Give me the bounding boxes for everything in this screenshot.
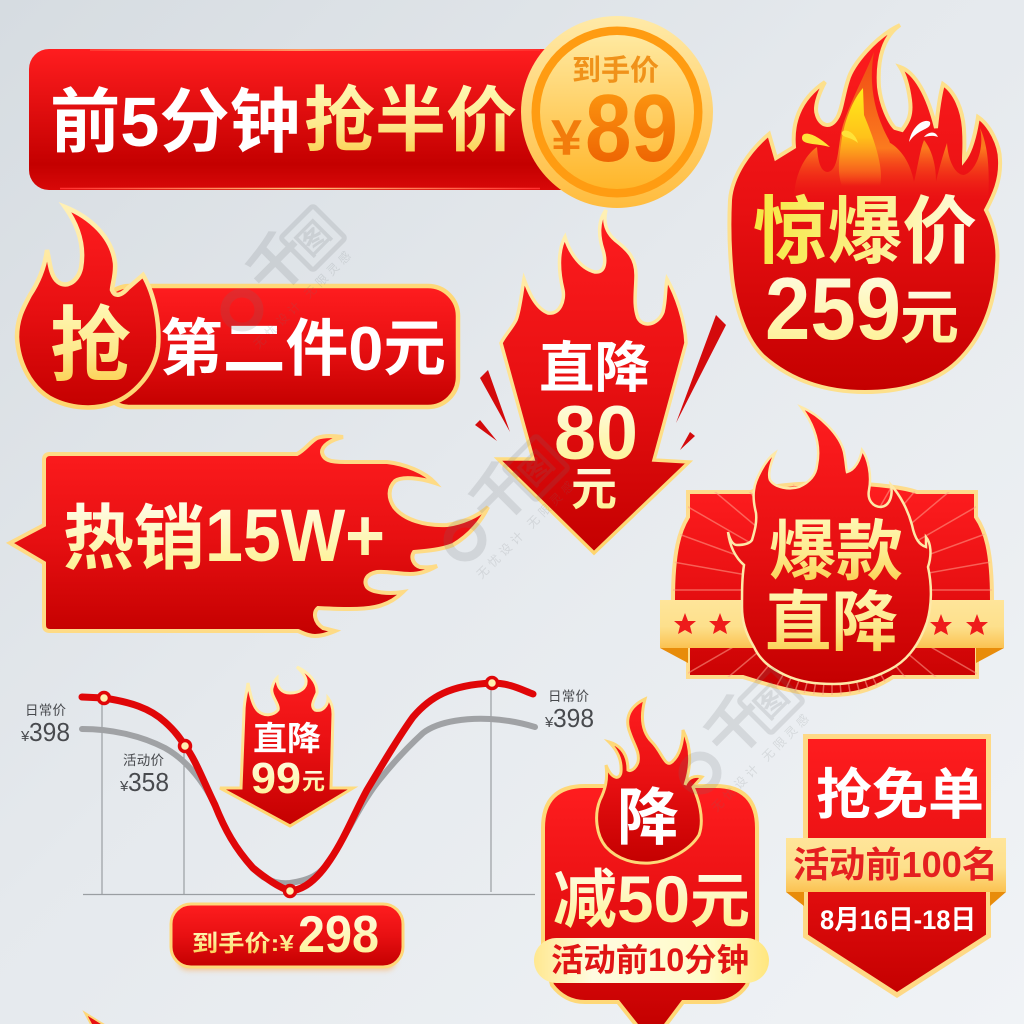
label: activity price [119,753,169,797]
small arrow shape [220,667,353,826]
card body [543,786,757,1024]
shield title: 抢免单 [816,764,984,826]
badge: bestseller price drop [660,404,1004,697]
badge: first 5 minutes half price [29,49,589,190]
card main text: 减 [553,864,617,936]
medallion line two: 直降 [765,585,898,659]
watermark one: 千 [233,219,323,309]
badge: free order shield [786,736,1006,995]
burst rays [475,315,726,450]
badge: shocking price flame [729,25,1000,392]
line chart: price curve [20,678,594,896]
arrow flame shape [498,210,689,553]
red price line [82,683,533,891]
decorative cut-off flame tip [85,1013,106,1024]
flame character: 抢 [50,301,131,392]
chart data points [98,678,498,896]
label: activity price: 活动价 [123,753,164,768]
inner yellow fire [839,88,881,186]
flame [17,207,158,407]
banner white text: 前5分钟 [50,83,300,161]
watermark one: 图 [290,215,338,263]
watermark two: 无忧设计 无限灵感 [473,475,580,582]
watermark one [225,205,357,352]
sunburst backing [673,483,992,695]
label: regular price right: 日常价 [548,689,590,704]
label: regular price left: 日常价 [25,703,66,718]
small arrow number: 99 [251,754,301,803]
watermark three [683,668,815,815]
watermark two [448,435,580,582]
gray regular price line [82,719,535,883]
banner body [29,49,589,190]
icon: gold price coin [521,16,713,208]
banner gold text: 抢半价 [304,82,517,161]
card pill text: 活动前10分钟 [551,942,749,978]
tag number: 15W+ [205,494,385,577]
label: regular price right: ¥ [544,714,554,731]
label: regular price left: ¥ [20,728,30,745]
pill label: 到手价:¥ [192,930,294,956]
white sparks [909,121,938,142]
label: regular price left: 398 [29,717,70,747]
medallion line one: 爆款 [769,514,903,588]
arrow unit: 元 [571,463,617,515]
stars [674,613,988,635]
badge: final price pill [171,904,403,970]
tag text: 热销 [63,500,205,579]
card flame character: 降 [617,784,679,853]
watermark one: 无忧设计 无限灵感 [250,245,357,352]
label: activity price: ¥ [119,778,129,795]
label: regular price left [20,703,70,747]
badge: hot sale flame tag [10,436,488,636]
watermark three: 千 [691,682,781,772]
small arrow unit: 元 [302,768,325,794]
card flame [597,699,702,863]
arrow number: 80 [554,391,638,476]
watermark three: 无忧设计 无限灵感 [708,708,815,815]
gold ribbon [660,600,1004,648]
watermark two: 图 [513,445,561,493]
coin price: 89 [585,75,678,182]
sparks [802,130,858,147]
tag shape [10,436,488,636]
flame unit: 元 [900,285,959,351]
shield ribbon [786,838,1006,892]
inner orange fire [794,52,989,200]
date text: 8月16日-18日 [820,905,976,935]
pill body [100,286,458,407]
small arrow title: 直降 [253,720,321,757]
card unit: 元 [690,868,750,935]
coin yen sign: ¥ [551,110,582,166]
coin label: 到手价 [572,54,659,87]
chart axes [83,686,535,894]
card number: 50 [617,862,690,936]
flame body [729,25,1000,392]
shield body [806,736,988,995]
label: activity price: 358 [128,767,169,797]
card pill [534,938,769,983]
flame title: 惊爆价 [753,190,977,273]
badge: small flame arrow drop 99 [220,667,353,826]
watermark three: 图 [748,678,796,726]
banner highlights [60,50,540,188]
pill shadow [178,950,396,970]
badge: second item 0 yuan [17,207,458,407]
pill text: 第二件0元 [160,315,446,384]
pill price: 298 [298,906,379,964]
badge: reduce 50 yuan [534,699,769,1024]
ribbon folds [786,892,1006,906]
arrow title: 直降 [539,337,650,399]
ribbon text: 活动前100名 [793,844,998,885]
flame medallion [728,407,931,684]
label: regular price right: 398 [553,703,594,733]
flame price: 259 [765,259,901,358]
label: regular price right [544,689,594,733]
ribbon folds [660,648,1004,663]
pill body [171,904,403,967]
badge: flame arrow price drop 80 [475,210,726,553]
watermark two: 千 [456,449,546,539]
